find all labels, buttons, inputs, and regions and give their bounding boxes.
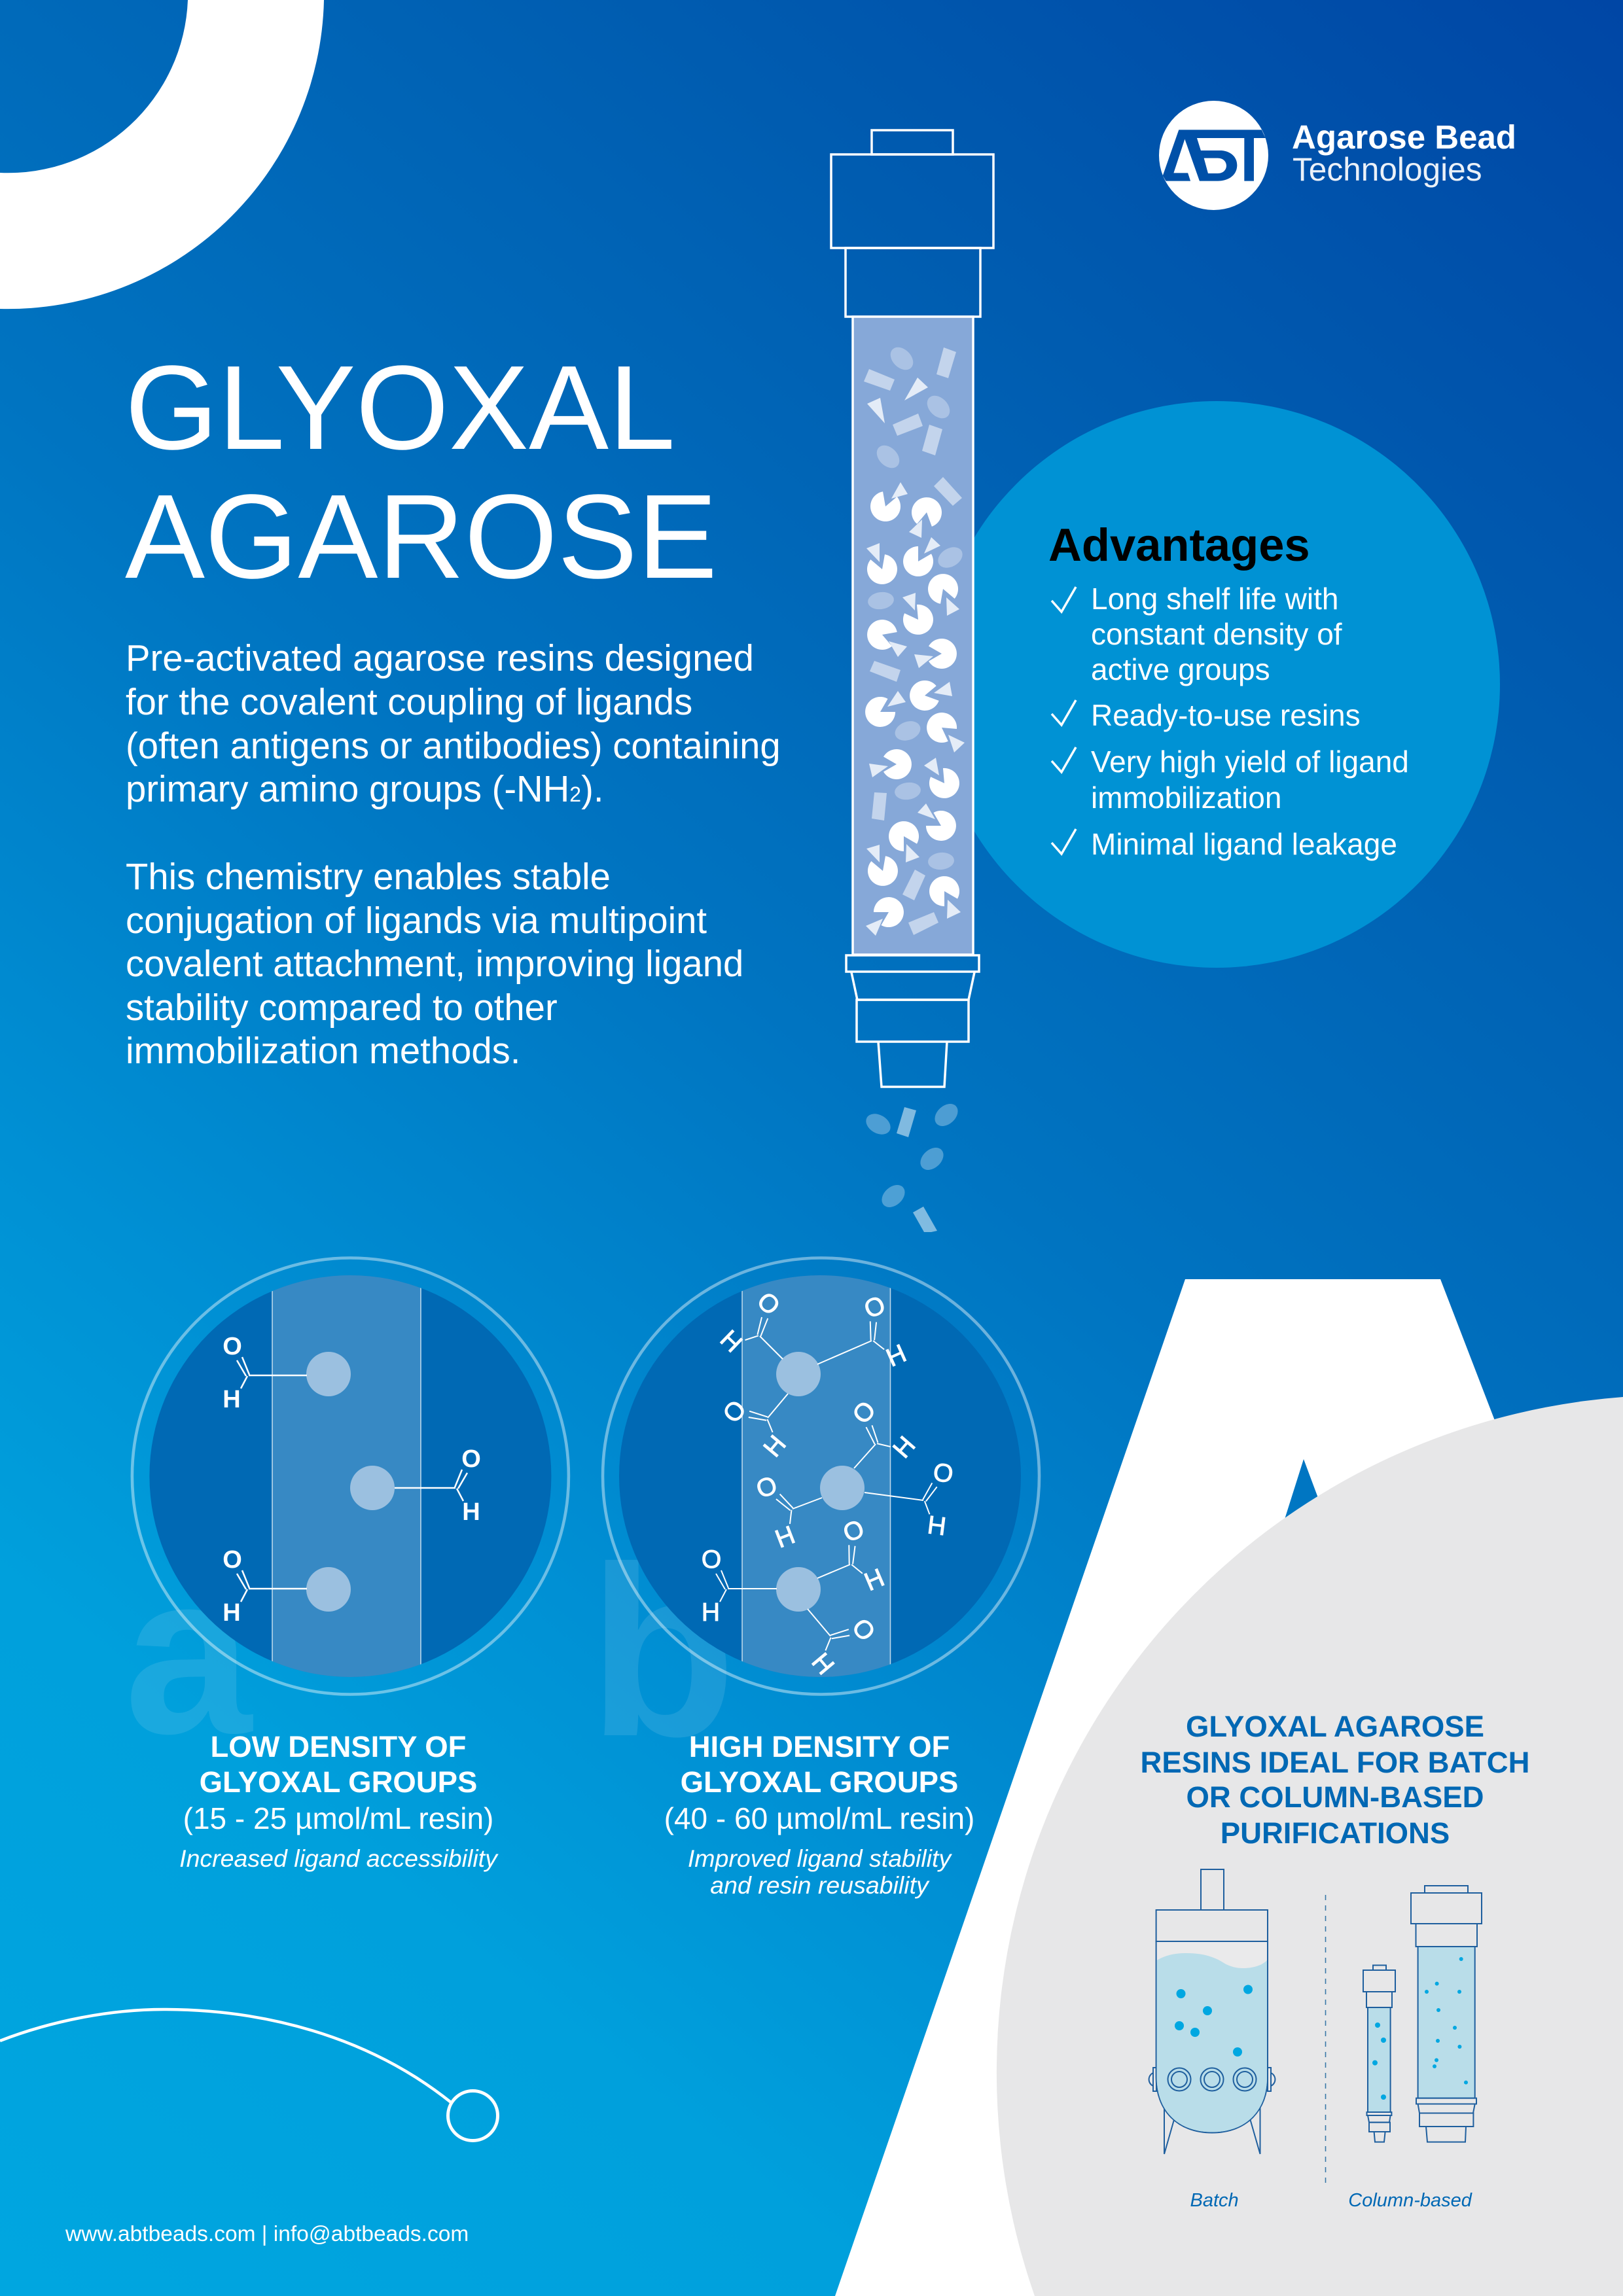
logo wordmark: Agarose Bead (1292, 118, 1516, 156)
large white letter A shape (835, 1279, 1623, 2296)
batch or column heading: PURIFICATIONS (1221, 1816, 1450, 1850)
list text: Very high yield of ligand (1091, 745, 1409, 779)
aldehyde group 8: H (702, 1598, 720, 1627)
low density diagram (132, 1258, 569, 1695)
low density caption: LOW DENSITY OF (211, 1730, 466, 1763)
aldehyde group 3: H (758, 1430, 792, 1462)
dashed divider (1325, 1895, 1326, 2185)
chemistry paragraph: conjugation of ligands via multipoint (126, 900, 707, 941)
outer ring (132, 1258, 569, 1695)
aldehyde group 5: O (932, 1458, 955, 1489)
aldehyde group 5: H (926, 1511, 948, 1541)
triangular ligands (866, 378, 965, 936)
watermark letter b: b (588, 1517, 736, 1787)
aldehyde group 3 (718, 1390, 797, 1462)
aldehyde group 3: H (223, 1599, 241, 1627)
column body outline (831, 130, 993, 1087)
aldehyde group 2: O (860, 1290, 889, 1324)
high density caption: HIGH DENSITY OF (689, 1730, 950, 1763)
oval particles (866, 343, 966, 871)
aldehyde group 7: H (861, 1564, 889, 1597)
aldehyde group 3: O (718, 1395, 752, 1428)
logo (1159, 101, 1516, 210)
inner disc (149, 1275, 551, 1677)
list text: immobilization (1091, 781, 1281, 815)
high density diagram (603, 1258, 1039, 1695)
aldehyde group 1 (223, 1333, 307, 1413)
logo wordmark (1292, 118, 1516, 188)
chemistry paragraph: immobilization methods. (126, 1030, 520, 1071)
outer ring (603, 1258, 1039, 1695)
footer contact line: www.abtbeads.com | info@abtbeads.com (65, 2222, 469, 2246)
aldehyde group 1: H (223, 1386, 241, 1413)
title (125, 340, 717, 603)
intro paragraph: primary amino groups (-NH2). (126, 768, 603, 809)
logo mark (1159, 101, 1268, 210)
low density caption: GLYOXAL GROUPS (200, 1765, 477, 1799)
chromatography column (831, 130, 993, 1087)
aldehyde group 6 (753, 1468, 807, 1554)
title: AGAROSE (125, 469, 717, 603)
decorative top-left arc (0, 0, 324, 309)
aldehyde group 2 (395, 1445, 481, 1526)
aldehyde group 6: O (753, 1471, 781, 1504)
high density caption: GLYOXAL GROUPS (681, 1765, 958, 1799)
intro paragraph: Pre-activated agarose resins designed (126, 637, 754, 679)
aldehyde group 7: O (839, 1515, 868, 1548)
batch or column heading: RESINS IDEAL FOR BATCH (1141, 1746, 1529, 1779)
bonds from beads (728, 1336, 923, 1636)
chemistry paragraph: This chemistry enables stable (126, 856, 611, 897)
batch reactor icon (1149, 1869, 1275, 2154)
large column icon (1411, 1886, 1482, 2142)
aldehyde group 3 (223, 1546, 307, 1627)
aldehyde group 7 (832, 1515, 889, 1600)
inner disc (619, 1275, 1021, 1677)
aldehyde group 8 (702, 1545, 728, 1627)
list text: Minimal ligand leakage (1091, 827, 1397, 861)
advantages list (1052, 582, 1409, 861)
aldehyde group 9: H (806, 1648, 840, 1680)
list text: Long shelf life with (1091, 582, 1338, 616)
aldehyde group 1 (715, 1287, 791, 1364)
high density caption (664, 1730, 974, 1899)
aldehyde group 4: H (887, 1431, 921, 1464)
aldehyde group 2: H (882, 1339, 910, 1373)
intro paragraph (126, 637, 781, 809)
beads (776, 1352, 865, 1612)
aldehyde group 3: O (223, 1546, 242, 1574)
aldehyde group 2: H (462, 1498, 480, 1526)
particles falling from the column (863, 1099, 962, 1232)
batch or column heading: GLYOXAL AGAROSE (1186, 1710, 1484, 1743)
aldehyde group 9 (801, 1608, 880, 1681)
check marks (1052, 587, 1076, 854)
advantages circle (933, 401, 1500, 968)
resin beads with open sites (860, 489, 965, 932)
small column icon (1363, 1966, 1395, 2142)
decorative curve with circle (0, 2009, 497, 2141)
high density caption: and resin reusability (710, 1871, 930, 1899)
aldehyde group 1: H (715, 1325, 747, 1358)
chemistry paragraph: covalent attachment, improving ligand (126, 943, 743, 984)
aldehyde group 9: O (846, 1614, 880, 1646)
advantages heading: Advantages (1048, 519, 1310, 571)
list text: Ready-to-use resins (1091, 698, 1361, 732)
high density caption: Improved ligand stability (688, 1845, 952, 1872)
intro paragraph: (often antigens or antibodies) containing (126, 725, 781, 766)
logo wordmark: Technologies (1293, 151, 1482, 188)
aldehyde group 2 (853, 1290, 911, 1375)
intro paragraph: for the covalent coupling of ligands (126, 681, 692, 722)
grey circle panel background (997, 1397, 1623, 2296)
high density caption: (40 - 60 µmol/mL resin) (664, 1801, 974, 1835)
watermark letter a: a (124, 1526, 253, 1782)
aldehyde group 2: O (461, 1445, 481, 1473)
resin strip (742, 1269, 890, 1688)
batch or column heading: OR COLUMN-BASED (1186, 1780, 1484, 1814)
aldehyde group 4 (843, 1396, 921, 1470)
aldehyde group 1: O (223, 1333, 242, 1360)
column-based label: Column-based (1348, 2190, 1472, 2211)
aldehyde group 6: H (772, 1521, 799, 1554)
list text (1091, 582, 1409, 861)
rectangular particles (864, 347, 962, 935)
list text: constant density of (1091, 617, 1342, 651)
aldehyde group 8: O (702, 1545, 721, 1574)
low density caption (179, 1730, 499, 1872)
chemistry paragraph: stability compared to other (126, 987, 558, 1028)
low density caption: (15 - 25 µmol/mL resin) (183, 1801, 493, 1835)
list text: active groups (1091, 652, 1270, 686)
aldehyde group 5 (918, 1457, 955, 1541)
batch or column heading (1141, 1710, 1529, 1850)
batch label: Batch (1190, 2190, 1239, 2211)
aldehyde group 4: O (847, 1396, 882, 1429)
chemistry paragraph (126, 856, 743, 1071)
beads (306, 1352, 395, 1612)
low density caption: Increased ligand accessibility (179, 1845, 499, 1872)
resin strip (272, 1269, 421, 1688)
title: GLYOXAL (125, 340, 675, 474)
aldehyde group 1: O (751, 1287, 785, 1321)
